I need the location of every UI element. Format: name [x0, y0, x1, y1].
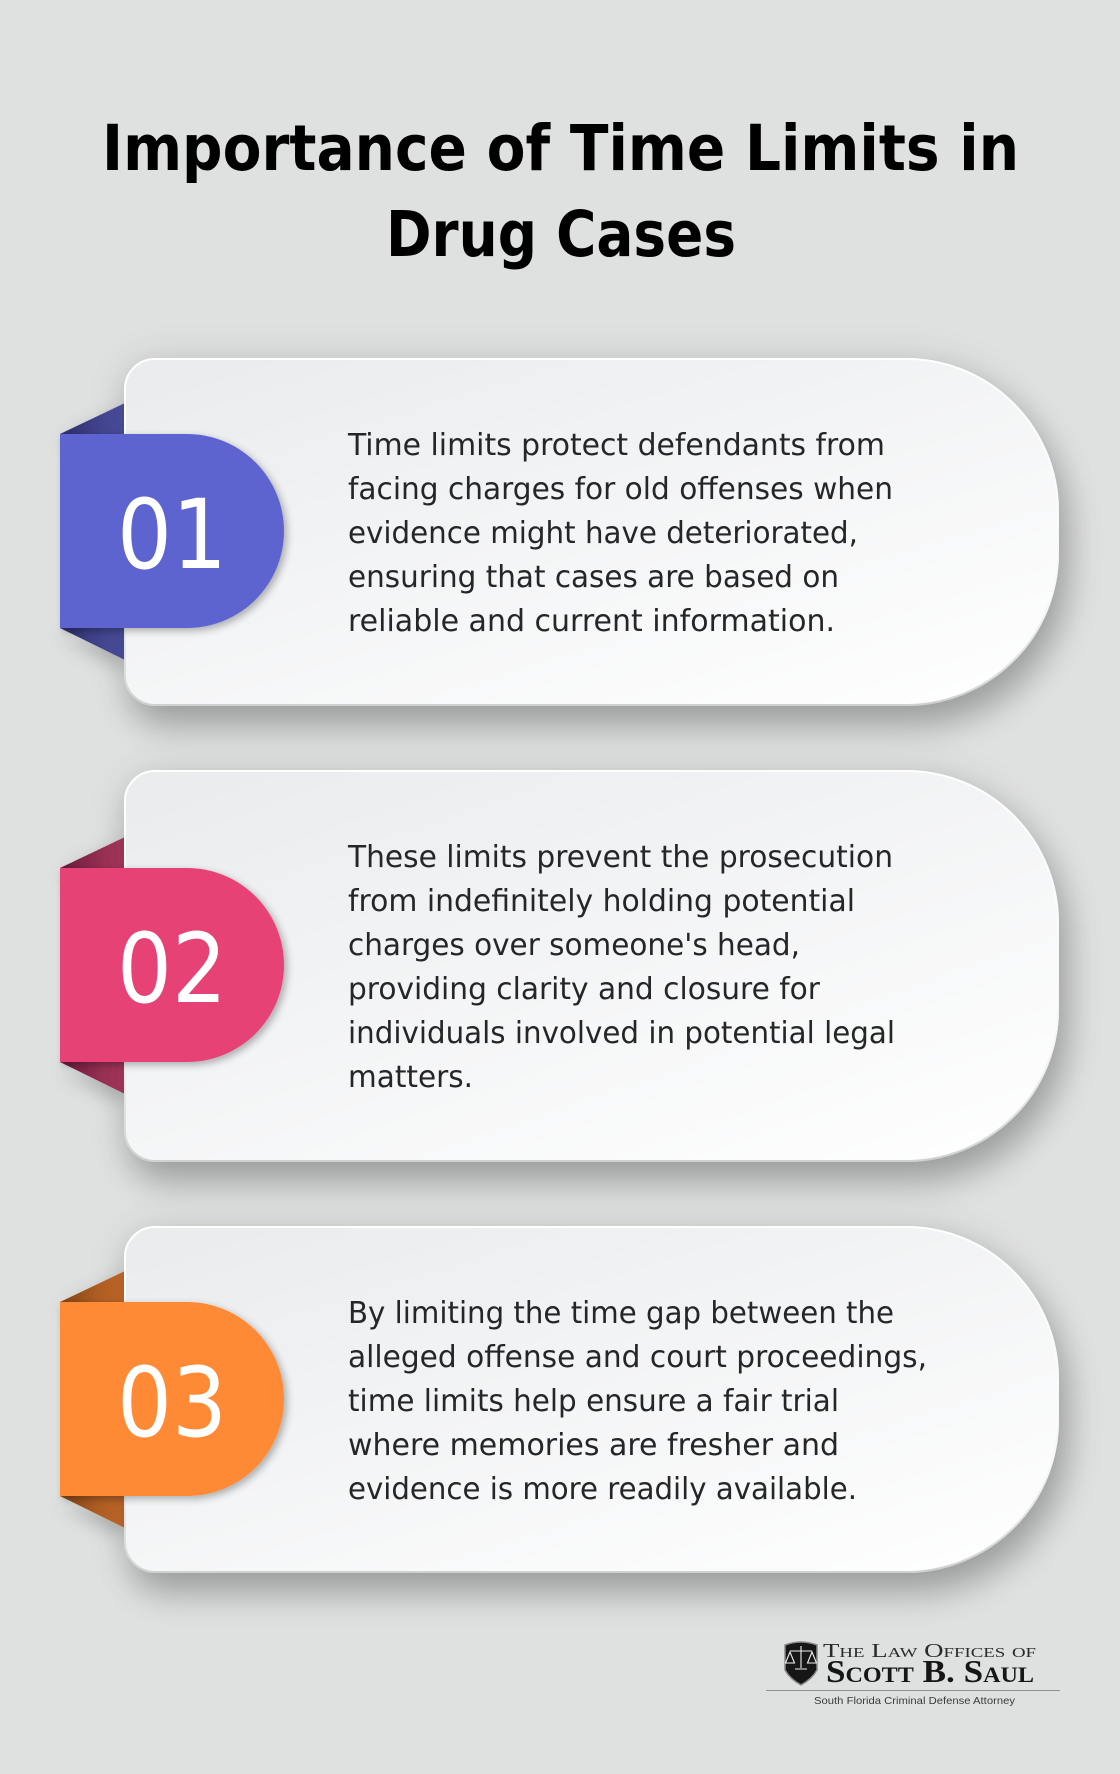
title	[102, 112, 1019, 271]
badge: 03	[60, 1302, 284, 1496]
ribbon fold: step 02	[60, 837, 125, 1094]
text: step 02: These limits prevent the prosecution	[347, 840, 893, 875]
card: step 03	[125, 1227, 1058, 1572]
text: step 02: providing clarity and closure for	[348, 972, 820, 1007]
text: step 03: time limits help ensure a fair trial	[348, 1384, 839, 1419]
text: step 02	[347, 840, 895, 1095]
text: step 03: alleged offense and court proceedings,	[348, 1340, 927, 1375]
title: Importance of Time Limits in	[102, 112, 1019, 185]
badge: 01: 01	[117, 479, 227, 591]
icon: scales of justice shield	[785, 1642, 817, 1685]
text: step 03: where memories are fresher and	[348, 1428, 839, 1463]
text: step 02: individuals involved in potential legal	[348, 1016, 895, 1051]
logo text: Scott B. Saul	[826, 1653, 1034, 1689]
logo text: The Law Offices of	[823, 1640, 1036, 1662]
badge: 02: 02	[117, 913, 227, 1025]
ribbon fold: step 03	[60, 1271, 125, 1528]
panel: step 01	[60, 359, 1058, 705]
text: step 03: evidence is more readily available.	[348, 1472, 857, 1507]
text: step 03	[348, 1296, 927, 1507]
badge: 01	[60, 434, 284, 628]
text: step 01: facing charges for old offenses when	[348, 472, 893, 507]
text: step 01: ensuring that cases are based on	[348, 560, 839, 595]
panel: step 02	[60, 771, 1058, 1161]
text: step 01: Time limits protect defendants from	[347, 428, 885, 463]
text: step 02: from indefinitely holding potential	[348, 884, 855, 919]
title: Drug Cases	[386, 198, 736, 271]
ribbon fold: step 01	[60, 403, 125, 660]
badge: 02	[60, 868, 284, 1062]
logo text	[823, 1640, 1036, 1689]
tagline: South Florida Criminal Defense Attorney	[814, 1695, 1016, 1707]
card: step 02	[125, 771, 1058, 1161]
text: step 03: By limiting the time gap between the	[348, 1296, 894, 1331]
text: step 01: evidence might have deteriorated,	[348, 516, 858, 551]
panel: step 03	[60, 1227, 1058, 1572]
card: step 01	[125, 359, 1058, 705]
divider line	[766, 1690, 1060, 1691]
text: step 01	[347, 428, 893, 639]
text: step 01: reliable and current information.	[348, 604, 835, 639]
text: step 02: matters.	[348, 1060, 473, 1095]
logo: law offices	[766, 1640, 1060, 1707]
text: step 02: charges over someone's head,	[348, 928, 800, 963]
badge: 03: 03	[117, 1347, 227, 1459]
